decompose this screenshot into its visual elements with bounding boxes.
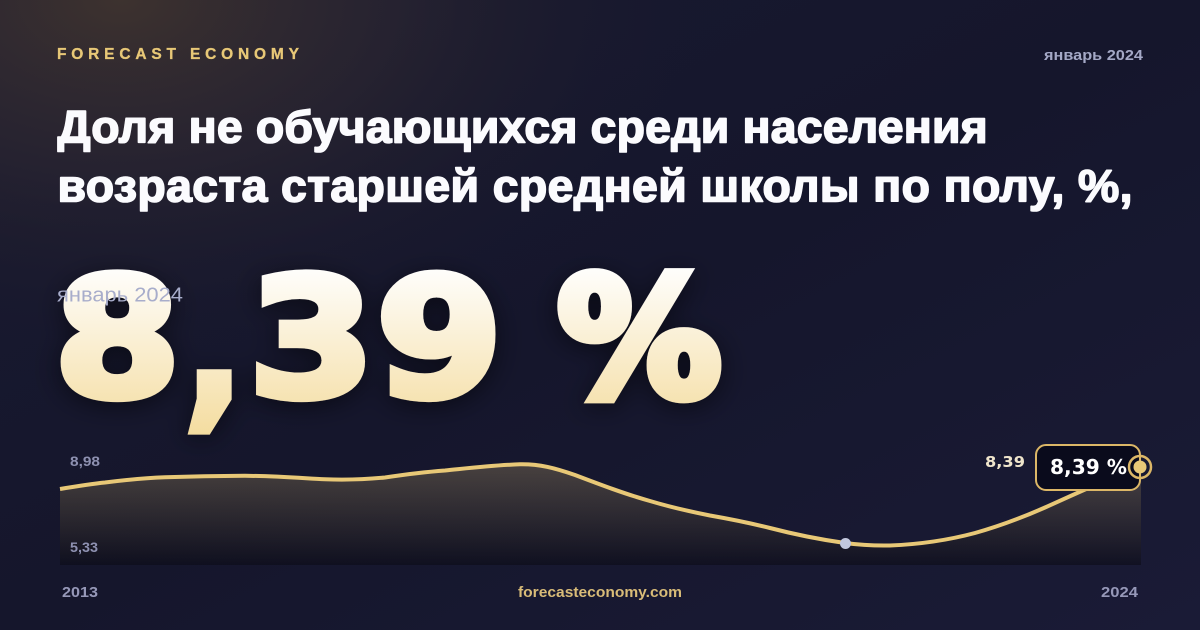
value tag: 8,39 %	[1050, 455, 1127, 479]
date top right: январь 2024	[1044, 47, 1144, 64]
title	[58, 101, 1133, 211]
title: возраста старшей средней школы по полу, %,	[58, 160, 1133, 211]
big value	[54, 237, 721, 449]
max label: 8,98	[70, 453, 100, 469]
chart area fill	[60, 464, 1141, 565]
title: Доля не обучающихся среди населения	[58, 101, 988, 152]
big value: 8	[54, 244, 180, 434]
start year: 2013	[62, 584, 98, 601]
date subtitle over value: январь 2024	[57, 284, 183, 306]
big value: ,	[181, 237, 247, 449]
value tag	[1036, 445, 1140, 490]
chart line	[60, 464, 1141, 546]
end point marker	[1129, 456, 1151, 478]
min point marker	[840, 538, 851, 549]
website: forecasteconomy.com	[518, 585, 682, 601]
big value: %	[558, 243, 721, 435]
end year: 2024	[1101, 584, 1139, 601]
big value: 39	[249, 244, 502, 434]
min label: 5,33	[70, 539, 98, 555]
current value label: 8,39	[985, 453, 1025, 471]
area chart	[60, 445, 1151, 565]
brand label: FORECAST ECONOMY	[57, 46, 300, 63]
